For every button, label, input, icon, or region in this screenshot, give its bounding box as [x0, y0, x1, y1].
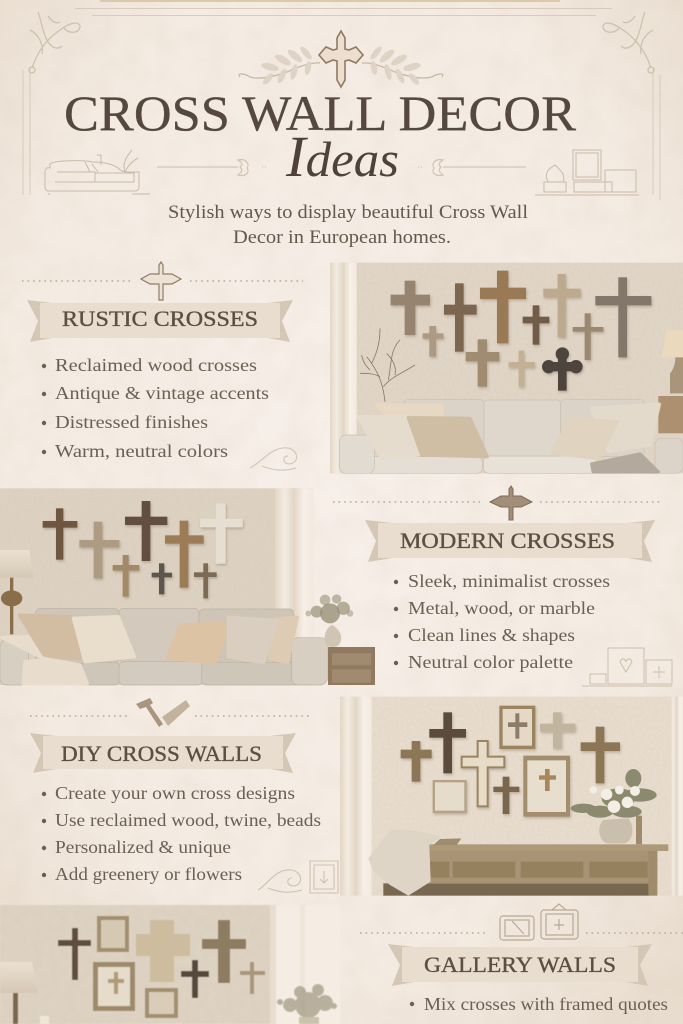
table lamp [658, 330, 683, 433]
laurel branch left [239, 45, 320, 86]
banner: gallery [388, 944, 652, 986]
flowers and vase [571, 769, 657, 844]
dotted rule [333, 501, 660, 503]
bullet list: modern: Neutral color palette [408, 652, 573, 672]
icon: sofa line drawing [45, 150, 150, 194]
icon: hammer and plank [136, 698, 190, 727]
divider left with scroll [157, 160, 266, 175]
pillows [358, 404, 659, 472]
bullet list: rustic: Reclaimed wood crosses [55, 355, 257, 375]
photo: modern cross wall with sofa [0, 488, 375, 685]
photo: rustic cross wall with sofa [330, 263, 683, 473]
sofa [339, 399, 683, 473]
bullet list: DIY: Personalized & unique [55, 837, 231, 857]
divider right with scroll [418, 160, 526, 175]
flourish [250, 448, 297, 470]
corner flourish left [29, 12, 80, 73]
foliage [571, 769, 657, 818]
crosses and frames [58, 916, 265, 1018]
section: rustic crosses [22, 262, 303, 470]
bullet list: modern [394, 571, 610, 672]
bullet list: rustic [42, 355, 269, 461]
wall crosses [43, 501, 243, 598]
photo: DIY gallery wall with console [340, 697, 683, 896]
plant in vase [277, 984, 337, 1024]
banner: DIY: DIY CROSS WALLS [61, 741, 262, 766]
bullet list: gallery: Mix crosses with framed quotes [424, 994, 668, 1014]
blooms [590, 786, 640, 813]
bullet list: DIY: Use reclaimed wood, twine, beads [55, 810, 321, 830]
section: gallery walls [360, 904, 683, 1014]
banner: gallery: GALLERY WALLS [424, 952, 616, 977]
bullet list: DIY: Create your own cross designs [55, 783, 295, 803]
dotted rule [30, 715, 310, 717]
crosses and frames [401, 706, 620, 817]
icon: small cross [141, 262, 181, 300]
bullet list: modern: Metal, wood, or marble [408, 598, 595, 618]
icon: two frames [500, 904, 578, 940]
header ornamental frame [23, 8, 660, 200]
plant foliage [305, 594, 353, 623]
bullet list: rustic: Antique & vintage accents [55, 383, 269, 403]
bullet list: modern: Sleek, minimalist crosses [408, 571, 610, 591]
table lamp and candles [0, 962, 49, 1024]
pillows [2, 615, 297, 684]
tagline: Stylish ways to display beautiful Cross Wall [168, 202, 528, 223]
section: DIY cross walls [30, 698, 338, 893]
console table [383, 844, 668, 896]
bullet list: rustic: Warm, neutral colors [55, 441, 228, 461]
tagline: Decor in European homes. [233, 227, 451, 248]
dotted rule [22, 280, 303, 282]
icon: frames with heart [582, 648, 672, 686]
draped throw and book [368, 830, 461, 896]
sofa [0, 608, 327, 685]
banner: rustic: RUSTIC CROSSES [62, 306, 258, 331]
side table and flower vase [305, 594, 375, 685]
photo: gallery wall with lamp and plant [0, 905, 340, 1024]
bullet list: modern: Clean lines & shapes [408, 625, 575, 645]
section: modern crosses [333, 486, 672, 686]
banner: DIY [30, 733, 296, 773]
icon: header cross [319, 31, 363, 87]
dotted rule [360, 932, 683, 934]
subtitle script word: Ideas: Ideas [285, 124, 399, 189]
tagline [168, 202, 528, 248]
banner: modern [365, 520, 655, 562]
corner flourish right [603, 12, 654, 73]
floor lamp [0, 550, 33, 634]
bullet list: rustic: Distressed finishes [55, 412, 208, 432]
banner: modern: MODERN CROSSES [400, 528, 615, 553]
banner: rustic [27, 300, 293, 342]
icon: frames and plant line drawing [535, 150, 639, 195]
bullet list: DIY: Add greenery or flowers [55, 864, 242, 884]
title: CROSS WALL DECOR [64, 85, 577, 141]
laurel branch right [362, 45, 443, 86]
icon: small cross [490, 486, 532, 520]
icon: flourish and small frame [258, 861, 338, 893]
wall crosses [391, 271, 651, 391]
header cross ornament [239, 31, 443, 87]
dried branch [360, 328, 415, 402]
bullet list: DIY [42, 783, 321, 884]
